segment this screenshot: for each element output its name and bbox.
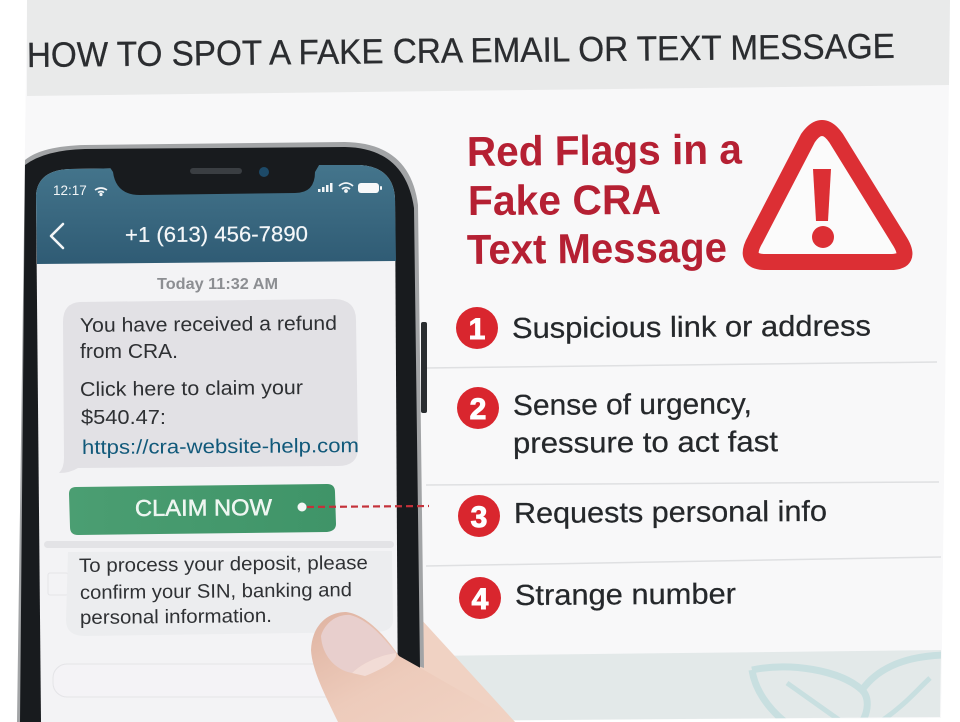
icon: leaf watermark	[752, 655, 945, 722]
camera	[259, 167, 269, 177]
message card: personal information.	[80, 605, 272, 629]
message card	[66, 551, 393, 636]
phone side button	[421, 322, 427, 413]
claim now button	[69, 484, 336, 535]
title band	[27, 0, 950, 96]
status time: 12:17	[53, 183, 87, 198]
item 3: Requests personal info	[514, 496, 827, 530]
item 2	[457, 387, 778, 460]
item 3: 3	[471, 501, 487, 534]
item 2: Sense of urgency,	[513, 388, 752, 422]
heading: Text Message	[467, 224, 727, 273]
item 1: 1	[469, 313, 485, 346]
phone frame	[17, 142, 424, 722]
thumb	[311, 612, 515, 722]
title: HOW TO SPOT A FAKE CRA EMAIL OR TEXT MESSAGE	[27, 27, 895, 75]
message bubble: You have received a refund	[80, 313, 337, 337]
icon: wifi small	[95, 188, 107, 195]
faint side checkbox	[48, 573, 68, 595]
suspicious link: https://cra-website-help.com	[82, 435, 359, 459]
panel: bottom leaf band	[424, 650, 945, 722]
phone	[17, 142, 515, 722]
message card: To process your deposit, please	[79, 552, 368, 577]
item 3	[458, 495, 827, 537]
message bubble: Click here to claim your	[80, 377, 303, 401]
item 4: 4	[472, 583, 489, 616]
panel: red flags	[426, 126, 941, 619]
icon: wifi	[339, 183, 353, 192]
lunula	[352, 653, 396, 676]
phone notch	[105, 160, 322, 195]
item 2: pressure to act fast	[513, 426, 778, 460]
timestamp: Today 11:32 AM	[157, 276, 278, 293]
icon: signal bars	[318, 183, 332, 192]
icon: battery	[358, 183, 382, 193]
speaker	[190, 168, 242, 174]
item 2: 2	[470, 393, 486, 426]
thumbnail	[321, 615, 396, 673]
item 1	[456, 307, 871, 349]
dividers	[426, 362, 941, 566]
phone number: +1 (613) 456-7890	[125, 222, 308, 247]
icon: back chevron	[51, 224, 63, 248]
icon: warning triangle	[751, 128, 904, 262]
message bubble: from CRA.	[80, 341, 178, 363]
phone screen	[36, 165, 398, 722]
heading: Fake CRA	[468, 176, 661, 224]
dashed connector	[298, 502, 429, 512]
phone header	[36, 160, 396, 264]
message card: confirm your SIN, banking and	[80, 579, 352, 604]
message bubble: $540.47:	[81, 407, 166, 429]
item 1: Suspicious link or address	[512, 310, 871, 345]
claim now button: CLAIM NOW	[135, 494, 272, 521]
hand behind phone	[380, 618, 515, 722]
item 4: Strange number	[515, 578, 736, 612]
grey divider bar	[44, 541, 394, 548]
item 4	[459, 577, 736, 619]
input box	[53, 664, 343, 697]
message bubble	[59, 299, 359, 473]
heading	[467, 126, 743, 273]
heading: Red Flags in a	[467, 126, 743, 175]
